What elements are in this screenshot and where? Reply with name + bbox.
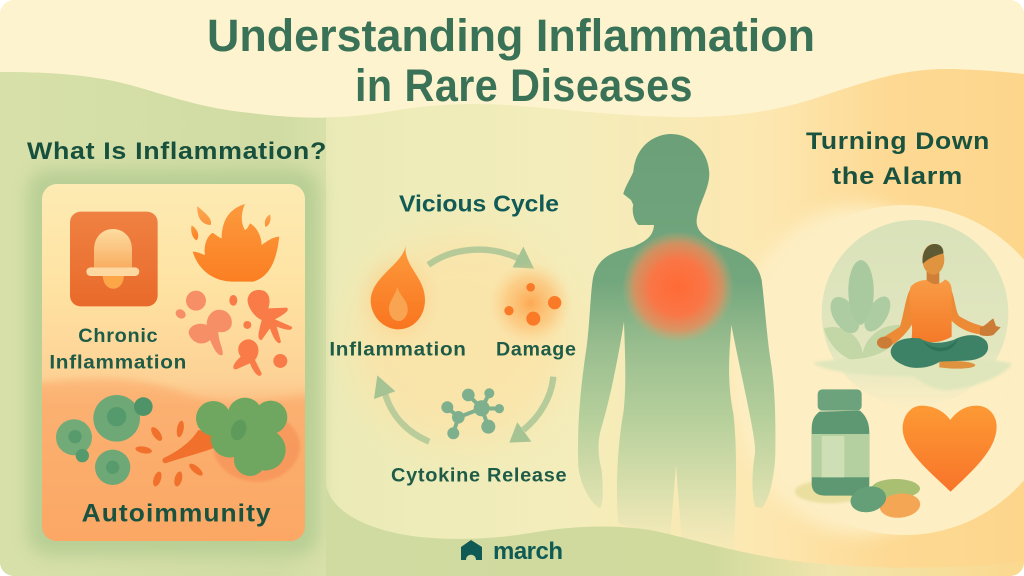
text: Chronic Inflammation: Chronic (78, 326, 158, 347)
arrow: cytokine release to inflammation (374, 375, 429, 442)
text: Chronic Inflammation (49, 326, 187, 374)
arrow: inflammation to damage (428, 247, 534, 269)
icon: pills (848, 479, 921, 520)
labels: cycle steps: Inflammation (329, 339, 467, 360)
heading: Turning Down the Alarm: the Alarm (832, 163, 963, 190)
icon: ground shadow (813, 357, 1012, 390)
text: Chronic Inflammation: Inflammation (49, 353, 187, 374)
heading: Vicious Cycle: Vicious Cycle (399, 191, 559, 217)
title: Understanding Inflammation (207, 10, 815, 61)
labels: cycle steps: Cytokine Release (391, 466, 567, 487)
bottom wave (326, 485, 1024, 576)
logo: march: march (493, 538, 563, 565)
icon: plant (824, 260, 903, 359)
heading: What Is Inflammation?: What Is Inflammation? (27, 138, 327, 165)
panel: management illustrations (795, 220, 1012, 520)
arrow: damage to cytokine release (509, 377, 553, 443)
icon: chest inflammation glow (622, 231, 734, 343)
heading: Turning Down the Alarm: Turning Down (806, 128, 990, 155)
icon: cytokine molecule (441, 388, 504, 439)
heading: Turning Down the Alarm (806, 128, 990, 190)
panel: vicious cycle (329, 191, 577, 487)
icon: flames (191, 204, 279, 282)
title (207, 10, 815, 111)
icon: immune attack on tissue (135, 398, 300, 487)
icon: meditation circle (822, 220, 1008, 407)
panel: inflammation card (42, 184, 305, 541)
icon: inflammatory cells (174, 290, 292, 376)
icon: alarm bell (70, 212, 158, 306)
icon: immune cells (56, 395, 153, 485)
text: Autoimmunity: Autoimmunity (82, 500, 272, 528)
icon: flame drop (354, 245, 441, 348)
labels: cycle steps (329, 339, 577, 487)
icon: damage spots (489, 262, 572, 345)
icon: heart (903, 406, 997, 492)
icon: medicine bottle (795, 389, 869, 503)
labels: cycle steps: Damage (496, 339, 577, 360)
illustration: human body silhouette (578, 134, 775, 553)
icon: meditating person (877, 244, 1001, 369)
logo: march (461, 538, 563, 565)
title: in Rare Diseases (355, 60, 693, 111)
